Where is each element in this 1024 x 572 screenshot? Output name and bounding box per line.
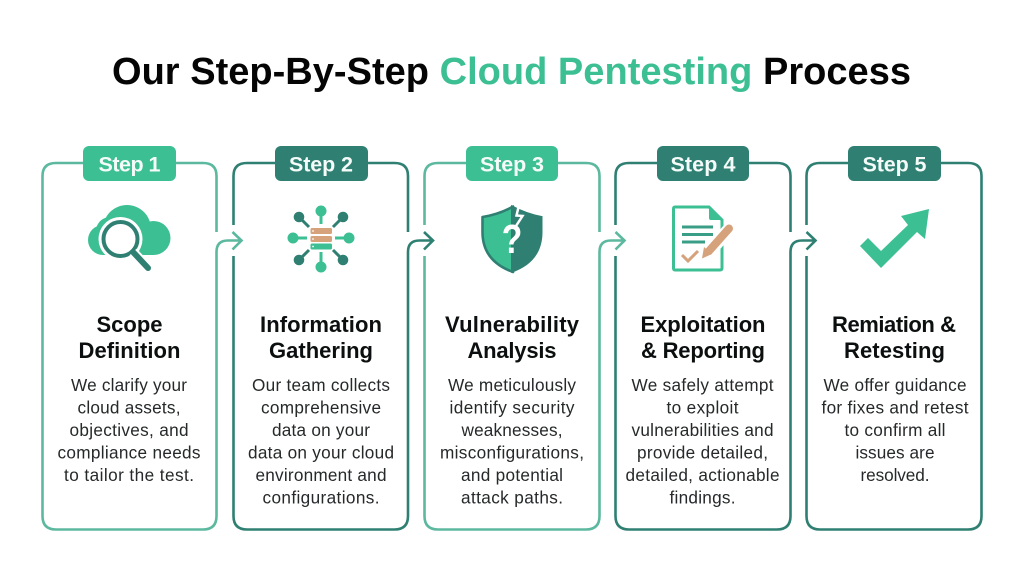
description: step 1: compliance needs (58, 442, 200, 462)
description: step 4: detailed, actionable (626, 465, 780, 485)
heading: step 5: Remiation & (832, 312, 956, 337)
badge: step 5 (848, 146, 941, 181)
badge: step 4 (657, 146, 749, 181)
heading: step 4 (640, 312, 766, 363)
description: step 1: to tailor the test. (64, 465, 194, 485)
description: step 4 (626, 375, 780, 508)
icon: server network (288, 206, 354, 272)
icon: cloud with magnifying glass (88, 205, 170, 269)
card outline: step 4 (616, 163, 790, 530)
description: step 1: cloud assets, (78, 398, 180, 418)
icon: check mark with rising arrow (860, 209, 929, 268)
heading: step 1: Scope (96, 312, 162, 337)
description: step 4: vulnerabilities and (632, 420, 774, 440)
icon: cracked shield with question mark: ? (502, 216, 522, 262)
arrow: step 3 to step 4 (600, 232, 624, 252)
panel: step 1 scope definition (42, 146, 216, 530)
arrow: step 2 to step 3 (408, 232, 433, 252)
heading: step 3 (445, 312, 580, 363)
description: step 5: resolved. (860, 465, 930, 485)
description: step 4: provide detailed, (637, 442, 768, 462)
description: step 3: misconfigurations, (440, 442, 584, 462)
description: step 5: to confirm all (844, 420, 946, 440)
description: step 5 (822, 375, 969, 485)
description: step 2: data on your cloud (248, 442, 394, 462)
description: step 3: attack paths. (461, 488, 563, 508)
description: step 2: Our team collects (252, 375, 390, 395)
card outline: step 1 (42, 163, 216, 530)
description: step 2: data on your (272, 420, 370, 440)
badge: step 1: Step 1 (98, 152, 161, 176)
description: step 2: configurations. (262, 488, 380, 508)
badge: step 2: Step 2 (289, 152, 353, 176)
icon: document with pencil (674, 207, 730, 270)
badge: step 3: Step 3 (480, 152, 544, 176)
panel: step 3 vulnerability analysis (424, 146, 600, 530)
badge: step 1 (83, 146, 176, 181)
panel: step 5 remediation and retesting (806, 146, 982, 530)
badge: step 4: Step 4 (670, 152, 736, 176)
description: step 1: objectives, and (70, 420, 188, 440)
badge: step 3 (466, 146, 558, 181)
heading: step 2: Information (260, 312, 382, 337)
heading: step 3: Vulnerability (445, 312, 580, 337)
description: step 3: We meticulously (448, 375, 576, 395)
description: step 5: for fixes and retest (822, 398, 969, 418)
description: step 1 (58, 375, 200, 485)
heading: step 2: Gathering (269, 338, 373, 363)
card outline: step 2 (234, 163, 408, 530)
panel: step 4 exploitation and reporting (616, 146, 790, 530)
arrow: step 1 to step 2 (216, 232, 242, 252)
heading: step 5 (832, 312, 956, 363)
description: step 3: and potential (461, 465, 563, 485)
card outline: step 3 (424, 163, 600, 530)
card outline: step 5 (806, 163, 982, 530)
description: step 2: comprehensive (261, 398, 381, 418)
description: step 4: findings. (670, 488, 736, 508)
description: step 2 (248, 375, 394, 508)
heading: step 4: Exploitation (640, 312, 766, 337)
heading: step 1: Definition (78, 338, 180, 363)
description: step 3 (440, 375, 584, 508)
description: step 1: We clarify your (71, 375, 187, 395)
description: step 4: We safely attempt (632, 375, 774, 395)
description: step 3: identify security (450, 398, 575, 418)
badge: step 2 (275, 146, 368, 181)
description: step 3: weaknesses, (460, 420, 562, 440)
description: step 4: to exploit (666, 398, 739, 418)
description: step 5: issues are (856, 442, 934, 462)
badge: step 5: Step 5 (862, 152, 927, 176)
heading: step 3: Analysis (468, 338, 556, 363)
title: Our Step-By-Step Cloud Pentesting Process (112, 51, 911, 93)
description: step 2: environment and (256, 465, 386, 485)
arrow: step 4 to step 5 (790, 232, 816, 252)
heading: step 5: Retesting (844, 338, 945, 363)
heading: step 2 (260, 312, 382, 363)
panel: step 2 information gathering (234, 146, 408, 530)
heading: step 1 (78, 312, 180, 363)
description: step 5: We offer guidance (824, 375, 966, 395)
heading: step 4: & Reporting (641, 338, 765, 363)
icon: cracked shield with question mark (482, 205, 542, 272)
